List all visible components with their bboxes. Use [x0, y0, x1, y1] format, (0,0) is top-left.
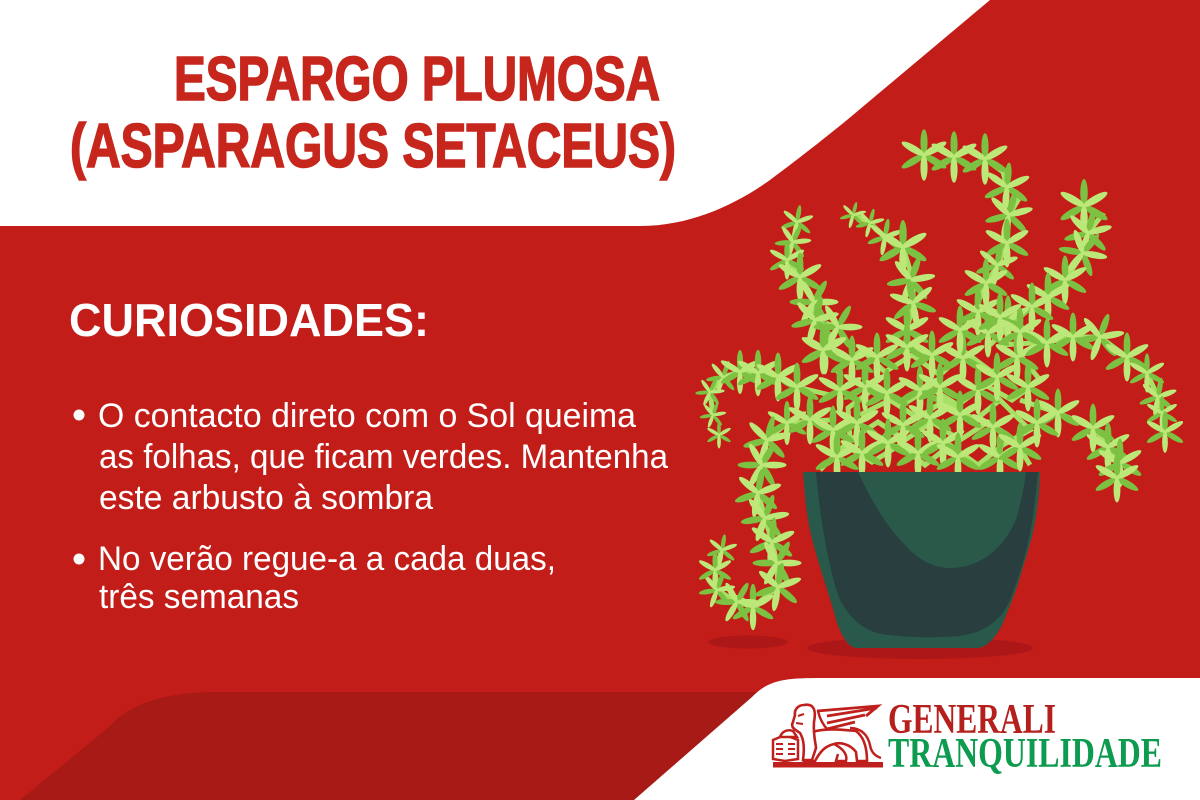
- bullet text: sun and shade: [74, 397, 669, 517]
- logo: generali: GENERALI: [888, 697, 1056, 743]
- dense foliage mass: [787, 292, 1070, 482]
- title: [70, 45, 676, 181]
- logo: [773, 697, 1162, 777]
- left upright branch: [769, 202, 870, 374]
- bullet text: sun and shade: este arbusto à sombra: [99, 479, 434, 517]
- background: white logo area: [634, 678, 1200, 800]
- heading: curiosidades: CURIOSIDADES:: [69, 294, 429, 346]
- right drooping branch: [1050, 306, 1184, 453]
- title: (ASPARAGUS SETACEUS): [70, 112, 676, 181]
- bullet text: watering: três semanas: [99, 578, 299, 616]
- right short droop branch: [1035, 388, 1143, 502]
- shadow: pot: [807, 637, 1033, 659]
- bullet text: watering: [74, 540, 556, 616]
- shadow: hanging stem: [708, 636, 788, 648]
- top curl branch: [900, 129, 1037, 336]
- right upright branch: [985, 179, 1116, 344]
- long hanging branch: [695, 401, 809, 631]
- title: ESPARGO PLUMOSA: [174, 45, 660, 114]
- flower pot: [803, 472, 1040, 648]
- plant foliage: [691, 129, 1184, 631]
- middle branch: [837, 199, 941, 354]
- background: dark red band: [20, 692, 800, 800]
- left drooping branch: [691, 350, 820, 448]
- background: white title area: [0, 0, 990, 226]
- logo: lion emblem: [773, 705, 883, 768]
- bullet text: watering: No verão regue-a a cada duas,: [98, 540, 556, 578]
- bullet text: sun and shade: as folhas, que ficam verdes. Mantenha: [99, 438, 669, 476]
- bullet text: sun and shade: O contacto direto com o Sol queima: [98, 397, 637, 435]
